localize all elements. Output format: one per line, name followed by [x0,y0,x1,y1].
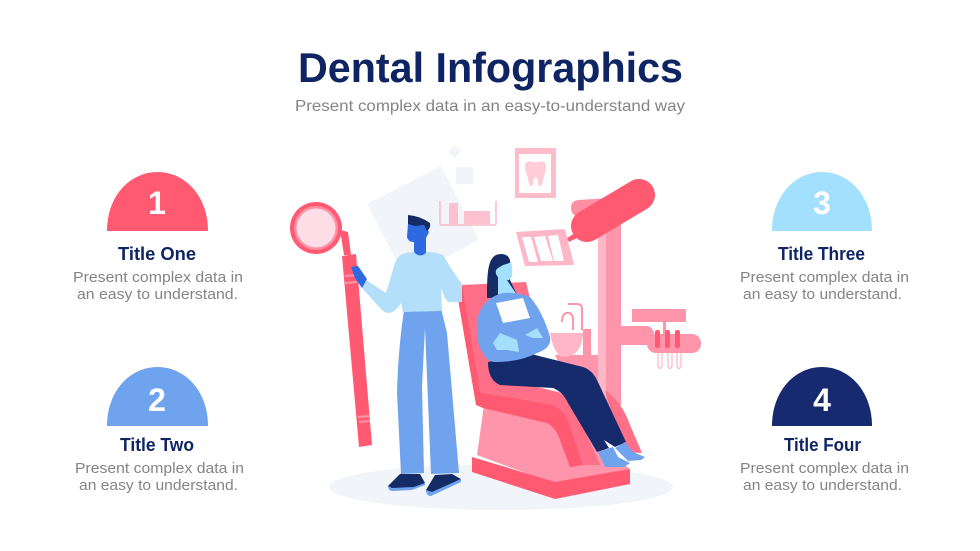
heading two: Title Two [120,435,194,455]
text one: an easy to understand. [77,286,238,303]
dentist hair [408,215,430,231]
heading one: Title One [118,244,196,264]
panel: title one [73,172,243,303]
patient head [496,262,517,300]
sink [550,304,598,400]
badge 2 [107,367,208,426]
patient torso [477,293,550,362]
subtitle: Present complex data in an easy-to-understand way [295,98,685,115]
lamp arm [567,195,639,242]
text one: Present complex data in [73,269,243,286]
dentist hand [351,266,367,288]
dentist shoes [388,474,461,496]
badge 1: 1 [148,185,166,221]
dentist head and neck [407,224,429,257]
patient hands [493,328,543,352]
text two: Present complex data in [75,460,244,477]
dentist shirt [362,252,462,313]
illustration: dentist scene [290,145,701,510]
dentist [351,215,462,496]
text one [73,269,243,303]
badge 4: 4 [813,382,831,418]
heading three: Title Three [778,244,865,264]
text two: an easy to understand. [79,477,238,494]
text two [75,460,244,494]
badge 3 [772,172,872,231]
patient bib [496,298,530,323]
title: Dental Infographics [298,44,683,91]
mirror prop [290,202,372,447]
patient shoes [598,442,645,467]
background shapes [367,145,479,278]
text three [740,269,909,303]
patient legs [488,353,626,452]
text four: an easy to understand. [743,477,902,494]
text four [740,460,909,494]
badge 4 [772,367,872,426]
badge 2: 2 [148,382,166,418]
text three: Present complex data in [740,269,909,286]
panel: title three [740,172,909,303]
panel: title four [740,367,909,494]
badge 3: 3 [813,185,831,221]
text three: an easy to understand. [743,286,902,303]
text four: Present complex data in [740,460,909,477]
dentist pants [397,308,459,474]
tooth picture [515,148,556,198]
patient [477,254,645,467]
panel: title two [75,367,244,494]
instrument tray [621,309,701,368]
dental chair [457,282,642,499]
lamp panel [516,229,574,266]
patient hair [487,254,518,298]
heading four: Title Four [784,435,861,455]
badge 1 [107,172,208,231]
shelf [440,201,496,225]
floor shadow [329,464,673,510]
dental unit column [571,198,621,405]
